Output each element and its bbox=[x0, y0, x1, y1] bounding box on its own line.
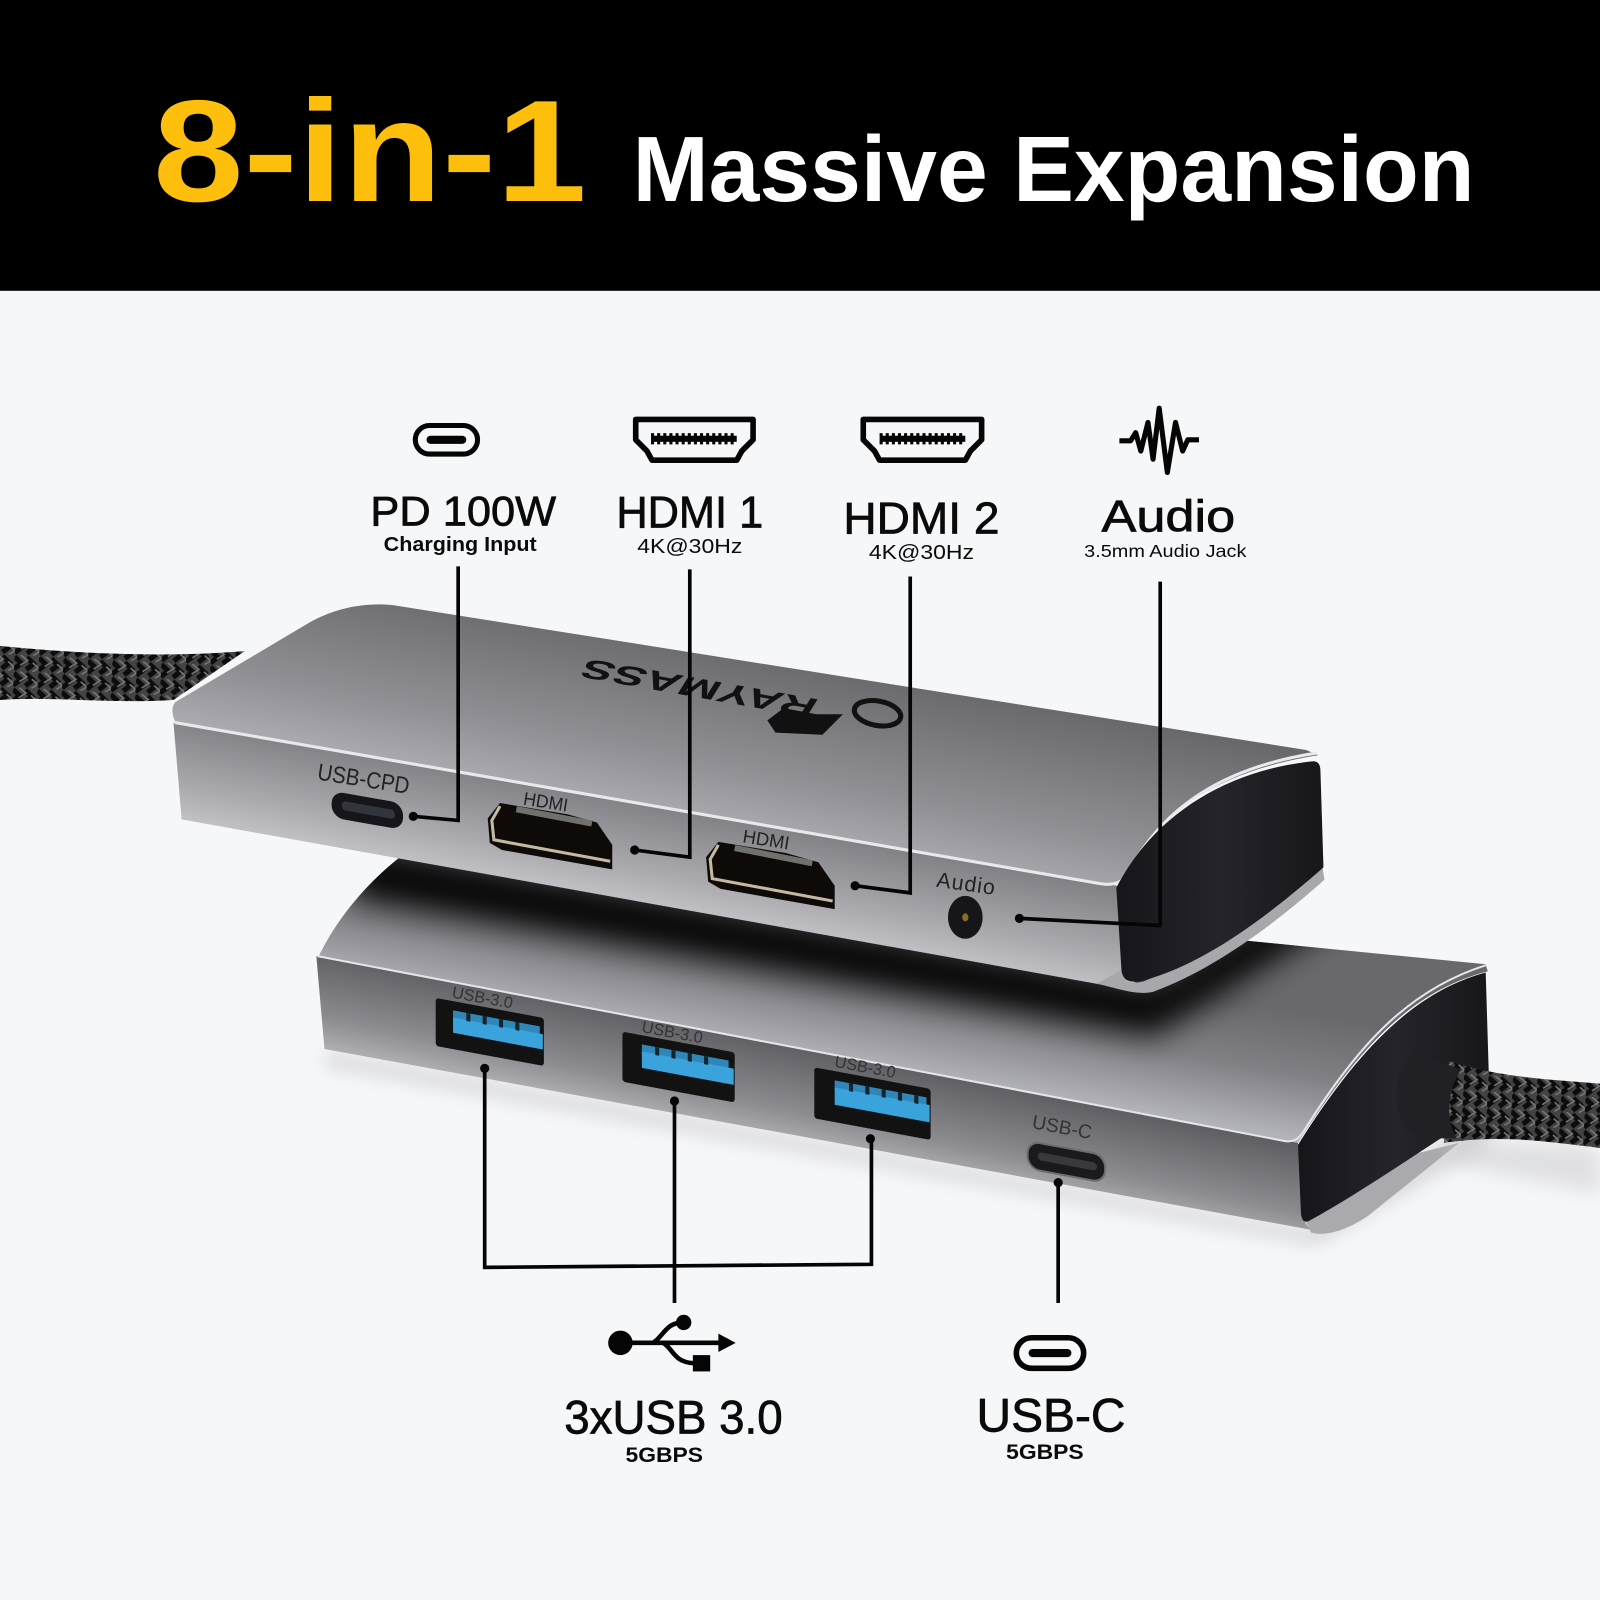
callout lines: USB 3.0 bbox=[480, 1064, 875, 1303]
USB port 3 bbox=[814, 1067, 931, 1140]
icon: audio waveform bbox=[1119, 408, 1199, 472]
USB-C PD port bbox=[332, 791, 403, 830]
upper hub unit bbox=[172, 604, 1324, 993]
lower hub shadow bbox=[324, 1051, 1490, 1245]
right braided cable bbox=[1444, 1061, 1600, 1148]
sublabel: 3.5mm Audio Jack: 3.5mm Audio Jack bbox=[1084, 541, 1247, 561]
printed label HDMI second: HDMI bbox=[741, 825, 791, 853]
printed label USB-CPD: USB-CPD bbox=[316, 759, 411, 799]
icon: HDMI 2 bbox=[863, 419, 982, 460]
label: PD 100W bbox=[370, 488, 557, 556]
title: Massive Expansion: Massive Expansion bbox=[633, 117, 1474, 221]
callout line: PD 100W bbox=[409, 566, 458, 821]
printed label Audio: Audio bbox=[935, 868, 998, 900]
label: USB-C: USB-C bbox=[977, 1390, 1126, 1442]
lower hub end cap bbox=[1298, 972, 1490, 1222]
label: HDMI 2 bbox=[843, 493, 999, 564]
icon: USB-C bbox=[1016, 1338, 1084, 1368]
printed label USB-C: USB-C bbox=[1030, 1111, 1094, 1144]
header band bbox=[0, 0, 1600, 291]
upper hub top face bbox=[172, 604, 1318, 885]
sublabel: 4K@30Hz: 4K@30Hz bbox=[869, 542, 974, 564]
audio jack bbox=[948, 896, 983, 939]
brand mark bbox=[767, 697, 903, 735]
icon: USB trident bbox=[608, 1315, 736, 1371]
sublabel: Charging Input: Charging Input bbox=[384, 534, 537, 556]
USB port 2 bbox=[622, 1032, 735, 1102]
HDMI port 1 bbox=[488, 803, 612, 869]
cable collar bbox=[1396, 1054, 1461, 1139]
callout line: HDMI 1 bbox=[630, 569, 690, 857]
HDMI port 2 bbox=[706, 842, 835, 909]
sublabel: 5GBPS: 5GBPS bbox=[1006, 1440, 1084, 1464]
icon: USB-C PD bbox=[415, 426, 478, 454]
label: PD 100W: PD 100W bbox=[370, 488, 557, 535]
icon: HDMI 1 bbox=[636, 419, 753, 460]
printed label USB-3.0 third: USB-3.0 bbox=[833, 1053, 897, 1082]
lower hub lip bbox=[1302, 1143, 1459, 1234]
label: USB-C bbox=[977, 1390, 1126, 1464]
label: Audio: Audio bbox=[1102, 491, 1235, 542]
printed label USB-3.0 second: USB-3.0 bbox=[640, 1018, 704, 1047]
brand wordmark: RAYMASS bbox=[574, 653, 825, 722]
printed brand logo bbox=[574, 653, 903, 735]
label: HDMI 1: HDMI 1 bbox=[616, 487, 763, 538]
lower hub front face bbox=[316, 956, 1327, 1233]
upper hub underside lip bbox=[1097, 867, 1324, 993]
USB-C port lower bbox=[1028, 1141, 1105, 1183]
callout line: USB-C bbox=[1054, 1178, 1063, 1303]
left braided cable bbox=[0, 646, 245, 701]
printed label USB-3.0 first: USB-3.0 bbox=[450, 984, 514, 1013]
label: HDMI 1 bbox=[616, 487, 763, 558]
upper hub front face bbox=[173, 722, 1151, 993]
printed label HDMI first: HDMI bbox=[522, 788, 570, 816]
lower hub front edge highlight bbox=[317, 956, 1486, 1141]
shadow from upper hub bbox=[347, 842, 1357, 1036]
USB port 1 bbox=[436, 998, 544, 1066]
upper hub front edge highlight bbox=[174, 722, 1316, 884]
title: 8-in-1: 8-in-1 bbox=[153, 70, 587, 232]
label: 3xUSB 3.0: 3xUSB 3.0 bbox=[564, 1392, 783, 1444]
label: HDMI 2: HDMI 2 bbox=[843, 493, 999, 544]
sublabel: 5GBPS: 5GBPS bbox=[626, 1443, 703, 1467]
lower hub top face bbox=[318, 857, 1488, 1143]
label: 3xUSB 3.0 bbox=[564, 1392, 783, 1467]
lower hub unit bbox=[316, 842, 1490, 1245]
upper hub end cap bbox=[1116, 761, 1323, 982]
callout line: HDMI 2 bbox=[851, 577, 910, 893]
callout line: Audio bbox=[1015, 582, 1160, 926]
label: Audio bbox=[1084, 491, 1247, 561]
right cable soft shadow bbox=[1449, 1138, 1600, 1194]
sublabel: 4K@30Hz: 4K@30Hz bbox=[637, 536, 742, 558]
